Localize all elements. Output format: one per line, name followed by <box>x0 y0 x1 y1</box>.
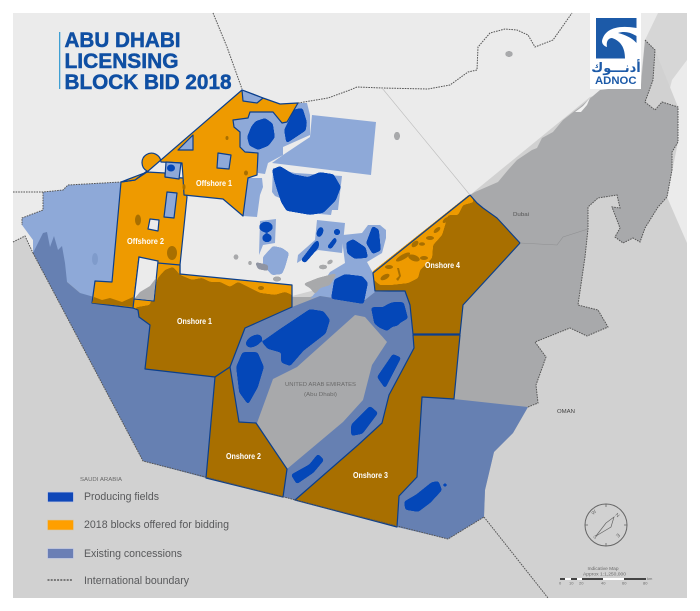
patch <box>244 170 248 176</box>
place: UNITED ARAB EMIRATES <box>285 382 356 388</box>
twenty: 20 <box>579 580 584 586</box>
patch <box>433 226 441 234</box>
coastal shoal <box>303 273 337 294</box>
patch <box>419 242 425 246</box>
map note: Indicative Map <box>588 566 619 571</box>
unit: km <box>647 576 653 581</box>
compass ring <box>585 504 627 546</box>
grey islands <box>234 51 513 294</box>
patch <box>395 251 411 263</box>
boundary far west <box>13 236 33 253</box>
ten: 10 <box>569 580 574 586</box>
coastal sabkha patches <box>379 216 450 282</box>
block: Offshore 2 <box>92 172 187 308</box>
patch <box>396 268 401 281</box>
square <box>165 162 181 179</box>
island <box>248 260 252 266</box>
label: Onshore 3 <box>353 471 388 480</box>
enclosed concession: north triangle <box>242 90 263 103</box>
enclosed concession: square <box>217 153 231 169</box>
label: Offshore 2 <box>127 237 165 246</box>
patch <box>420 256 428 260</box>
label: 2018 blocks offered for bidding <box>84 519 229 531</box>
maritime boundary west <box>13 182 121 192</box>
field <box>372 303 407 330</box>
title rule <box>59 32 60 89</box>
hole in Onshore 1 <box>134 257 158 301</box>
north: N <box>614 512 621 519</box>
field <box>292 455 323 483</box>
island <box>318 265 328 269</box>
compass letters <box>590 509 621 541</box>
compass ticks <box>585 504 627 546</box>
label: Onshore 4 <box>425 261 460 270</box>
island west <box>234 254 238 260</box>
patch <box>135 214 141 226</box>
United Arab Emirates interior <box>257 315 387 469</box>
Saudi Arabia border <box>33 253 484 539</box>
bar segments <box>560 578 646 580</box>
block: Onshore 1 <box>133 257 292 377</box>
swatch <box>48 548 74 558</box>
field <box>352 407 377 435</box>
legend: producing fields <box>48 491 159 503</box>
place: Dubai <box>513 212 529 218</box>
concession: island <box>263 246 289 275</box>
island <box>272 276 282 282</box>
island <box>326 259 334 265</box>
line 2: LICENSING <box>64 50 178 73</box>
place: (Abu Dhabi) <box>304 392 337 398</box>
line 3: BLOCK BID 2018 <box>64 71 232 94</box>
neighbouring land: Musandam <box>645 13 687 110</box>
legend <box>48 491 229 587</box>
label: Offshore 1 <box>196 179 232 188</box>
brown patches in offshore blocks <box>135 136 264 290</box>
field <box>378 355 400 387</box>
block labels <box>127 179 460 480</box>
field <box>167 164 175 172</box>
falcon <box>602 27 636 58</box>
concession: large offshore rectangle <box>272 115 376 175</box>
patch <box>410 240 420 248</box>
enclosed concession: producing field square <box>165 162 181 179</box>
concession: cluster near coast <box>310 225 386 300</box>
south: S <box>591 534 599 541</box>
legend: blocks offered <box>48 519 229 531</box>
concession: north offshore <box>233 103 310 174</box>
field <box>347 240 367 258</box>
boundary at western concession <box>22 192 43 225</box>
swatch <box>48 492 74 502</box>
patch <box>385 265 393 269</box>
place: OMAN <box>557 409 575 415</box>
line sample <box>48 579 73 581</box>
legend: existing concessions <box>48 548 182 560</box>
block: Onshore 2 <box>206 367 287 497</box>
label: Onshore 1 <box>177 317 212 326</box>
concession: strip beside Offshore 1 <box>243 178 263 217</box>
field <box>334 230 340 234</box>
field <box>316 227 324 237</box>
patch <box>167 246 177 260</box>
patch <box>258 286 264 290</box>
concession: south-east <box>397 397 528 539</box>
island chain <box>255 262 268 271</box>
central concession ring <box>230 291 414 500</box>
hole in Offshore 2 <box>148 219 159 231</box>
field <box>328 238 336 248</box>
field <box>263 234 271 242</box>
Oman border <box>528 40 678 407</box>
maritime boundary north-west <box>213 13 242 89</box>
field <box>302 241 318 262</box>
concession patch <box>92 253 98 265</box>
block: Offshore 1 <box>121 90 298 216</box>
field <box>285 109 306 142</box>
Onshore 4 outline <box>373 195 520 334</box>
Offshore 2 land portion <box>92 297 134 307</box>
map scale: Approx 1:1,250,000 <box>583 572 627 576</box>
patch <box>426 236 434 240</box>
southern boundary <box>484 517 548 598</box>
island far north <box>505 51 513 57</box>
grey land in hole <box>134 278 156 300</box>
patch <box>442 216 450 224</box>
compass <box>585 504 627 546</box>
field <box>237 353 263 403</box>
maritime boundary north <box>298 13 572 103</box>
place names <box>80 212 575 483</box>
label: Onshore 2 <box>226 452 261 461</box>
patch <box>407 253 421 263</box>
concession: rod fields <box>297 220 345 263</box>
east: E <box>614 532 621 539</box>
concession: twin fields <box>259 219 276 255</box>
Onshore 1 land portion <box>133 267 292 377</box>
field <box>444 484 446 486</box>
producing fields <box>237 109 446 511</box>
enclosed concession: strip <box>164 192 177 218</box>
field <box>248 119 274 149</box>
ADNOC wordmark: ADNOC <box>595 75 637 87</box>
head stripe <box>618 32 636 43</box>
Onshore 4 coastal shallows <box>372 194 474 285</box>
sixty: 60 <box>622 580 627 586</box>
block: Onshore 3 <box>295 335 460 527</box>
coastal islets <box>575 98 590 112</box>
block: Onshore 4 <box>373 195 520 334</box>
label: Producing fields <box>84 491 159 503</box>
Arabic wordmark: أدنـــوك <box>591 59 641 75</box>
emirate boundary <box>520 229 588 245</box>
line 1: ABU DHABI <box>64 29 180 52</box>
emblem square <box>596 18 636 58</box>
concession: central offshore <box>272 168 342 215</box>
title <box>59 29 232 94</box>
eighty: 80 <box>643 580 648 586</box>
concession: western, over sea <box>22 182 121 303</box>
zero: 0 <box>559 580 562 586</box>
patch <box>182 184 186 190</box>
field <box>260 222 272 232</box>
field <box>245 333 263 349</box>
scale bar <box>559 576 653 586</box>
concession: western, over land <box>33 232 215 478</box>
United Arab Emirates land <box>33 40 678 539</box>
thin maritime line <box>382 88 470 195</box>
place: SAUDI ARABIA <box>80 477 122 483</box>
label: International boundary <box>84 575 189 587</box>
patch <box>226 136 228 140</box>
label: Existing concessions <box>84 548 182 560</box>
enclosed concession: triangle <box>178 135 193 150</box>
field <box>405 482 441 511</box>
west: W <box>590 509 598 517</box>
bar background <box>560 578 646 580</box>
falcon emblem <box>596 18 636 58</box>
logo background <box>590 13 641 89</box>
field <box>332 275 367 303</box>
patch <box>379 272 391 282</box>
scale note <box>583 566 627 576</box>
title text <box>64 29 232 94</box>
compass needle <box>596 517 614 536</box>
field <box>273 167 340 214</box>
forty: 40 <box>601 580 606 586</box>
Onshore 1 outline <box>133 257 292 377</box>
field <box>263 310 329 365</box>
swatch <box>48 520 74 530</box>
island north <box>394 132 400 140</box>
ADNOC logo <box>590 13 641 89</box>
field <box>367 227 380 253</box>
